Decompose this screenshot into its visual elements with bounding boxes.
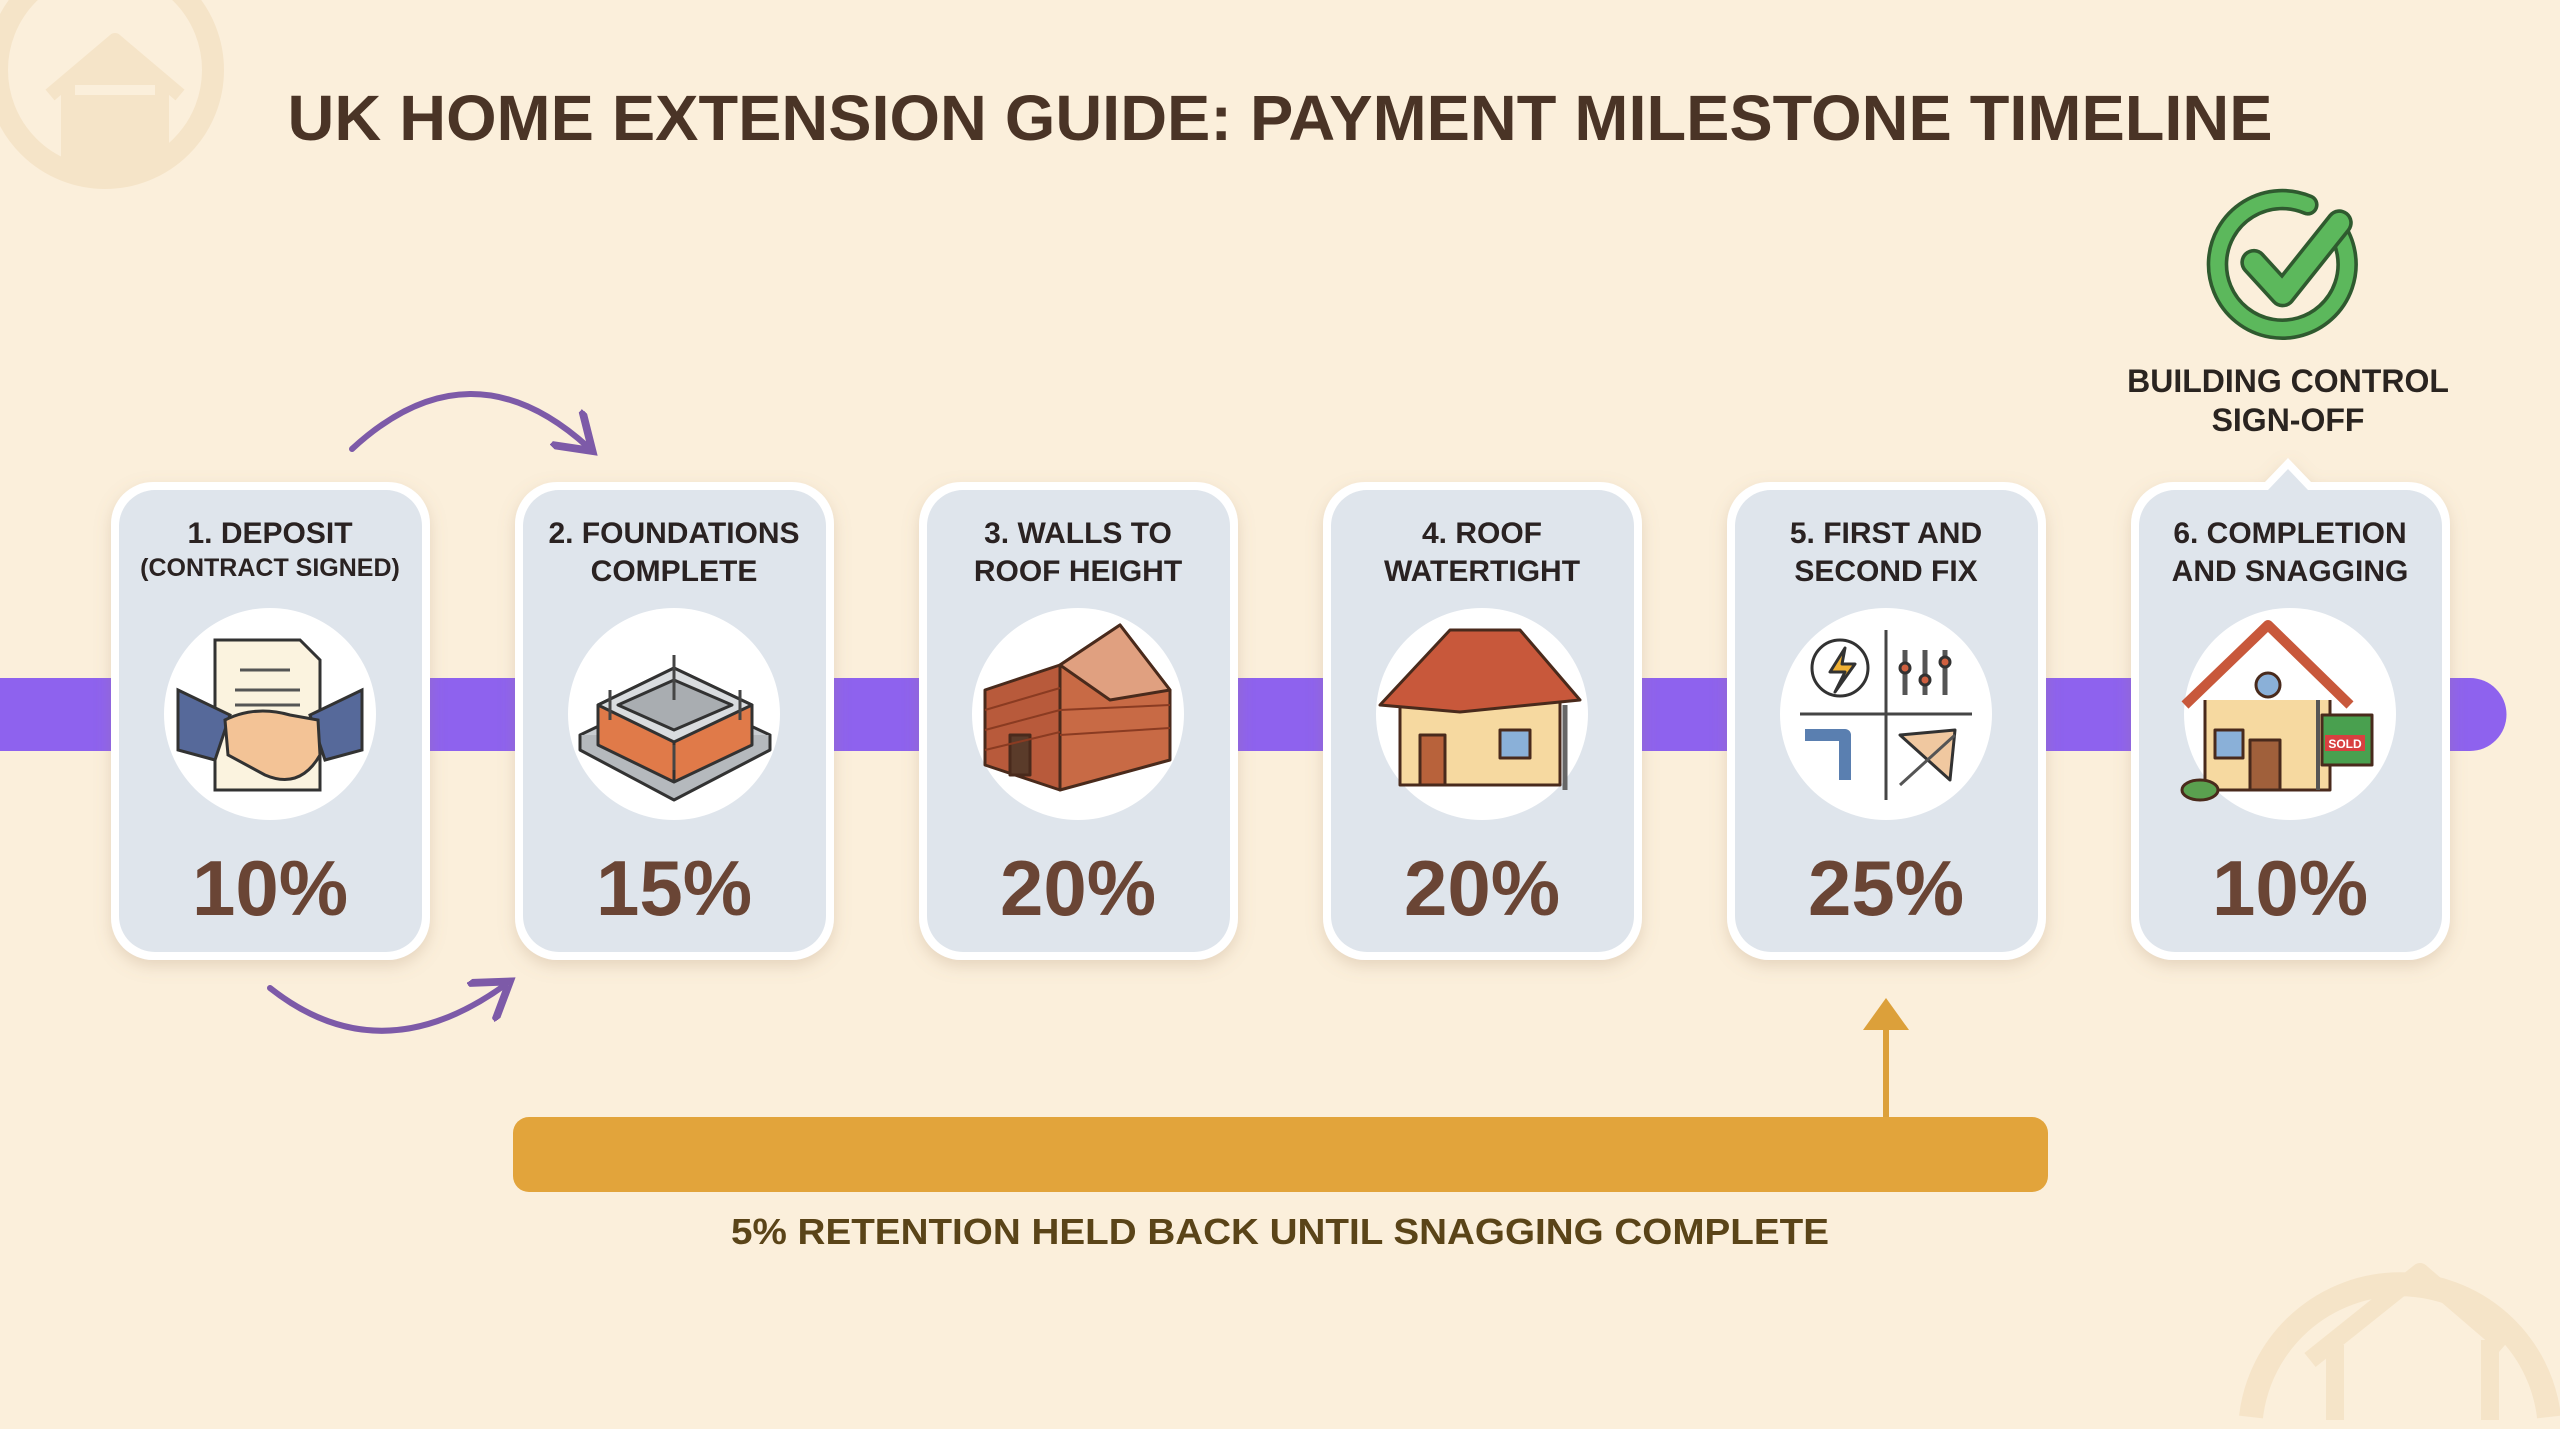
callout: building control sign-off: BUILDING CONTROL [2127,363,2449,399]
panel: card 4 roof: 20% [1404,844,1560,932]
panel: card 4 roof: 4. ROOF [1422,517,1542,550]
panel: card 6 completion: 6. COMPLETION [2173,517,2407,550]
panel: card 4 roof [1323,482,1642,960]
panel: card 3 walls [919,482,1238,960]
retention caption: 5% RETENTION HELD BACK UNTIL SNAGGING COMPLETE [731,1211,1829,1252]
arrow: top curve [352,394,588,449]
panel: card 1 deposit: 10% [192,844,348,932]
panel: card 1 deposit [111,482,430,960]
panel: card 3 walls: ROOF HEIGHT [974,555,1182,588]
panel: card 2 foundations: 2. FOUNDATIONS [548,517,800,550]
decorative house badge bottom-right [2251,1272,2549,1420]
icon: brick walls [985,625,1170,790]
icon: trades quadrants [1800,630,1972,800]
callout: building control sign-off [2127,200,2449,438]
arrow: bottom curve [270,985,505,1031]
icon: finished house with sold sign: SOLD [2328,737,2362,751]
callout: building control sign-off: SIGN-OFF [2212,402,2364,438]
panel: card 3 walls: 3. WALLS TO [984,517,1172,550]
panel: card 1 deposit: 1. DEPOSIT [187,517,353,550]
icon: green check circle [2217,200,2347,329]
panel: card 2 foundations [515,482,834,960]
icon: finished house with sold sign [2182,625,2372,800]
panel: card 4 roof: WATERTIGHT [1384,555,1580,588]
panel: card 2 foundations: 15% [596,844,752,932]
panel: card 6 completion [2131,458,2450,960]
panel: card 5 first and second fix: 5. FIRST AND [1790,517,1982,550]
panel: card 5 first and second fix: SECOND FIX [1794,555,1978,588]
icon: house with roof [1380,630,1580,790]
retention bar [513,1117,2048,1192]
panel: card 6 completion: 10% [2212,844,2368,932]
timeline bar [0,678,2506,751]
icon: handshake over contract [178,640,362,790]
panel: card 2 foundations: COMPLETE [591,555,757,588]
panel: card 5 first and second fix: 25% [1808,844,1964,932]
panel: card 6 completion: AND SNAGGING [2172,555,2408,588]
panel: card 3 walls: 20% [1000,844,1156,932]
decorative house badge top-left [0,0,213,178]
arrow: retention up arrow [1863,998,1909,1117]
panel: card 5 first and second fix [1727,482,2046,960]
icon: foundation block [580,655,770,800]
panel: card 1 deposit: (CONTRACT SIGNED) [140,554,400,582]
title: UK HOME EXTENSION GUIDE: PAYMENT MILESTONE TIMELINE [288,82,2272,154]
